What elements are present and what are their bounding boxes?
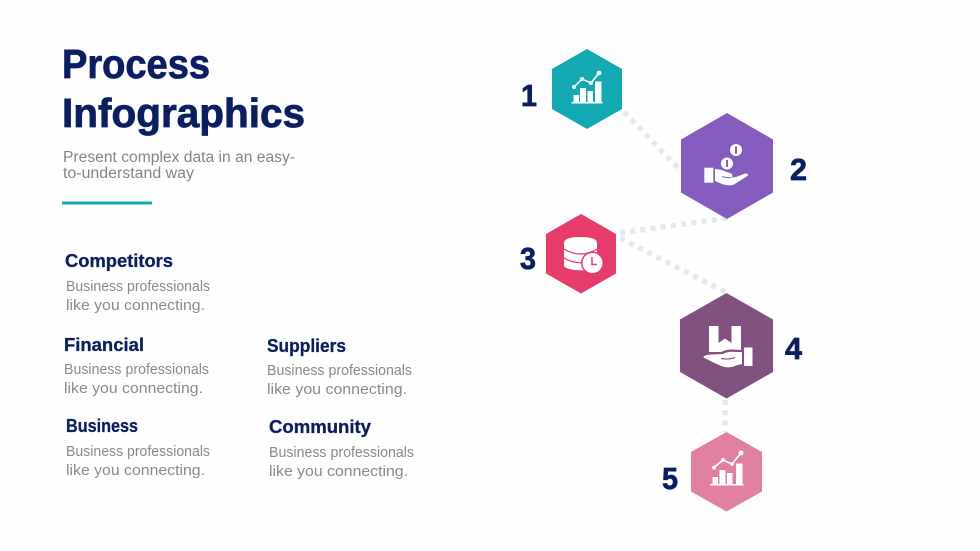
text block: Community: like you connecting. xyxy=(269,464,408,480)
step 3: crimson hexagon with database clock icon xyxy=(520,214,616,294)
step 4: plum hexagon with box in hand icon xyxy=(680,293,803,398)
step 5: rose hexagon with chart icon xyxy=(662,432,762,512)
number 5: 5 xyxy=(662,461,678,496)
icon: hand holding package xyxy=(703,326,752,367)
text block: Competitors: like you connecting. xyxy=(66,298,205,314)
text block: Financial xyxy=(64,334,209,397)
text block: Suppliers: Suppliers xyxy=(267,335,346,356)
icon: database with clock xyxy=(564,237,604,274)
text block: Business xyxy=(66,415,210,479)
text block: Community: Business professionals xyxy=(269,445,414,461)
text block: Business: Business xyxy=(66,415,138,436)
text block: Suppliers: Business professionals xyxy=(267,363,412,379)
text block: Financial: Business professionals xyxy=(64,362,209,378)
number 1: 1 xyxy=(521,78,537,113)
text block: Community: Community xyxy=(269,416,372,437)
text block: Financial: like you connecting. xyxy=(64,381,203,397)
icon: hand receiving coins xyxy=(704,144,748,185)
text block: Financial: Financial xyxy=(64,334,144,355)
text block: Community xyxy=(269,416,414,480)
number 4: 4 xyxy=(785,331,803,366)
number 2: 2 xyxy=(790,152,807,187)
subtitle: to-understand way xyxy=(63,165,194,182)
step 1: teal hexagon with chart icon xyxy=(521,49,622,129)
text block: Business: Business professionals xyxy=(66,444,210,460)
text block: Competitors: Business professionals xyxy=(66,279,210,295)
title: Process xyxy=(62,41,210,87)
step 2: purple hexagon with coins in hand icon xyxy=(681,113,807,219)
dotted connectors between hexagons xyxy=(620,112,727,432)
title: Infographics xyxy=(62,90,305,136)
subtitle: Present complex data in an easy- xyxy=(63,149,295,166)
text block: Suppliers: like you connecting. xyxy=(267,382,407,398)
text block: Competitors xyxy=(65,250,210,314)
text block: Competitors: Competitors xyxy=(65,250,173,271)
title xyxy=(62,41,305,136)
icon: bar chart with trend line xyxy=(710,450,744,486)
text block: Suppliers xyxy=(267,335,412,398)
number 3: 3 xyxy=(520,241,536,276)
accent rule under subtitle xyxy=(62,202,152,204)
subtitle xyxy=(63,149,295,182)
icon: bar chart with trend line xyxy=(572,71,602,104)
text block: Business: like you connecting. xyxy=(66,463,205,479)
